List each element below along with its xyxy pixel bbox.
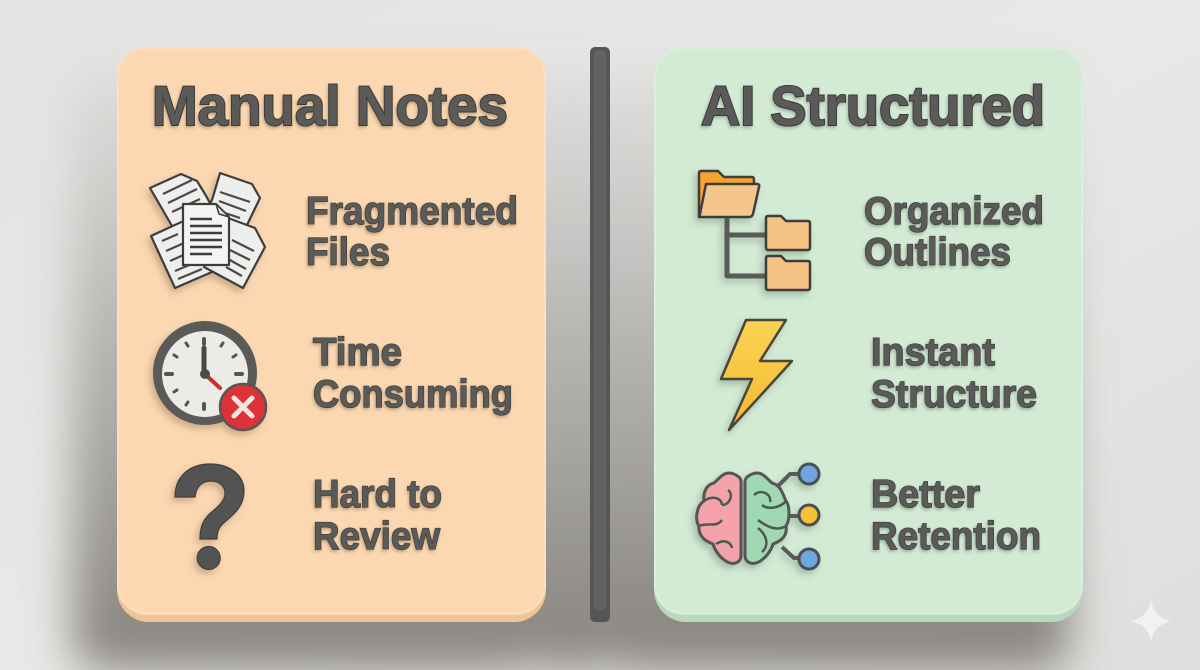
label: Hard to Review [313,473,442,558]
label: Organized Outlines: Outlines [864,231,1011,274]
label: Time Consuming: Consuming [313,373,513,416]
heading: AI Structured: AI Structured [701,74,1045,137]
label: Instant Structure: Structure [871,373,1037,416]
label: Hard to Review: Review [313,515,441,558]
label: Instant Structure [871,331,1037,416]
label: Better Retention: Better [871,473,980,516]
label: Hard to Review: Hard to [313,473,442,516]
icon: clock with red x [153,321,266,430]
label: Time Consuming [313,331,513,416]
label: Fragmented Files: Files [306,231,390,274]
label: Instant Structure: Instant [871,331,995,374]
label: Better Retention: Retention [871,515,1041,558]
icon: fragmented files [150,173,265,288]
label: Organized Outlines [864,190,1044,274]
icon: sparkle watermark [1130,600,1172,642]
heading: Manual Notes: Manual Notes [152,74,508,137]
divider [590,47,610,622]
label: Fragmented Files [306,190,518,274]
label: Better Retention [871,473,1041,558]
panel shadows [72,70,1070,670]
label: Fragmented Files: Fragmented [306,190,518,233]
panel: AI structured [654,47,1083,622]
label: Organized Outlines: Organized [864,190,1044,233]
icon: lightning bolt [721,320,792,430]
icon: question mark [175,464,244,570]
icon: brain with nodes [697,464,819,569]
panel: manual notes [117,47,546,622]
icon: folder tree [699,171,810,290]
label: Time Consuming: Time [313,331,402,374]
